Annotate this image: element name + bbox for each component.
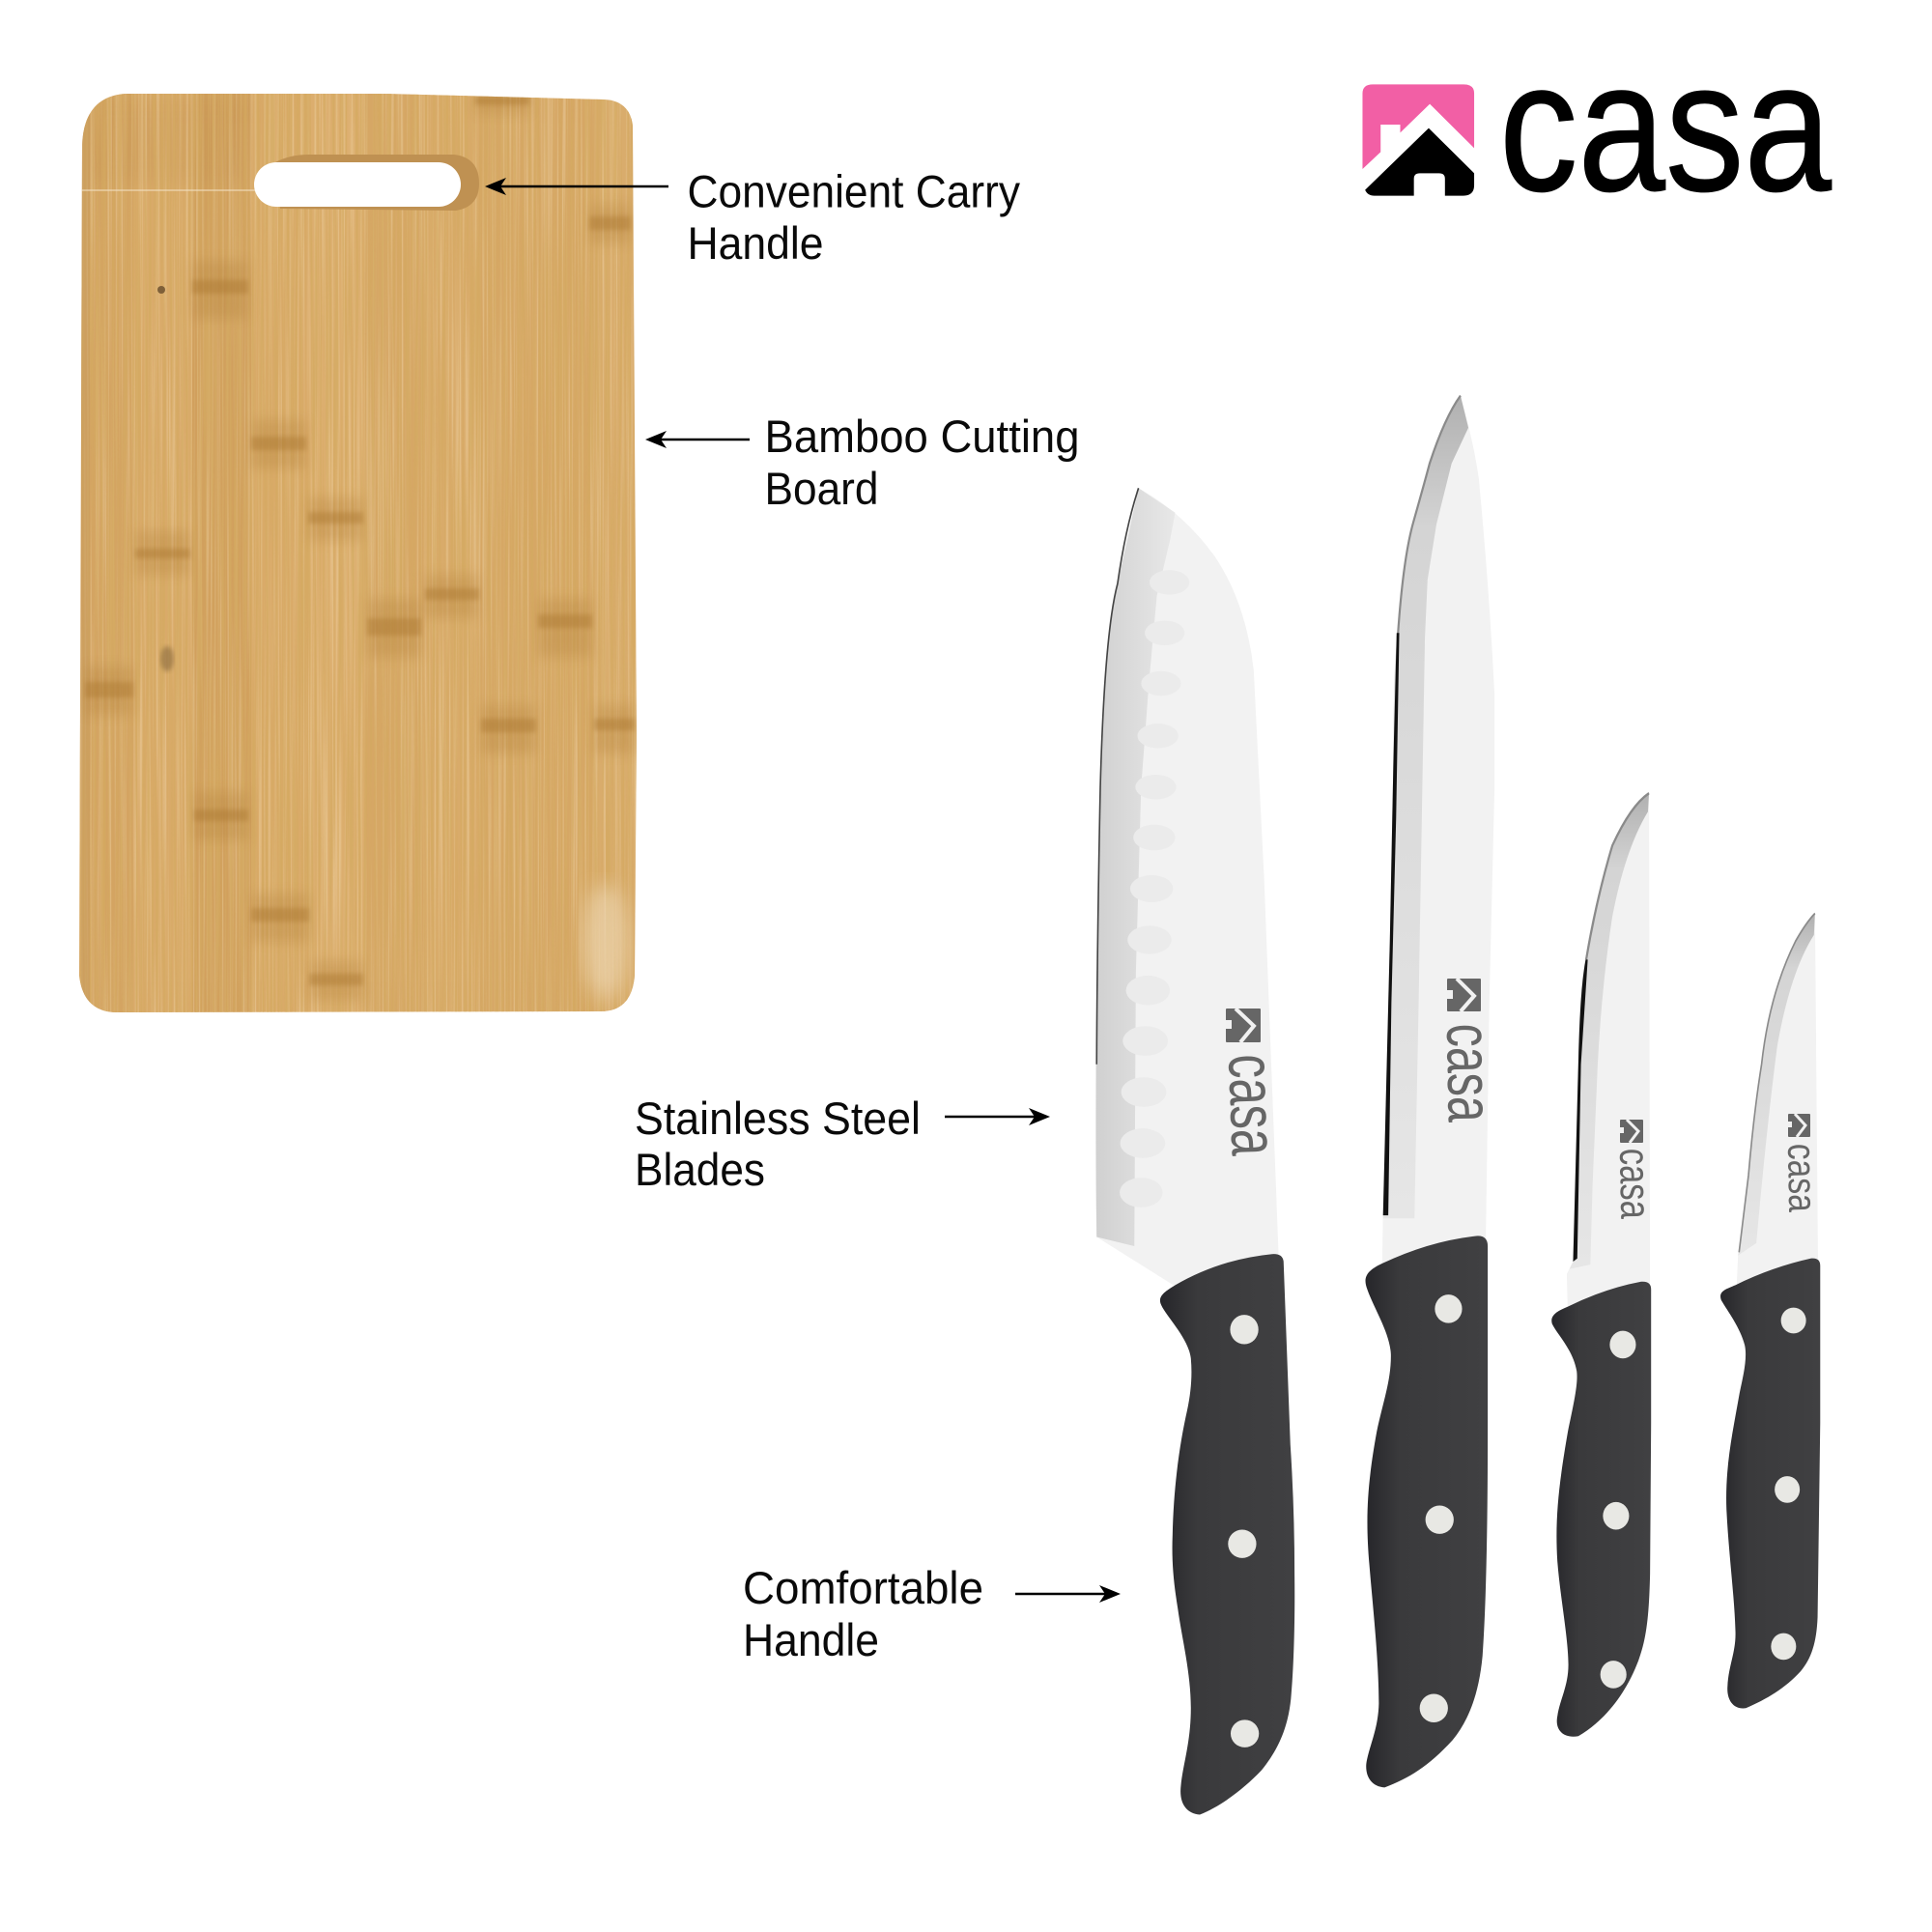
brand logo xyxy=(1362,22,1832,230)
callout: bamboo cutting board xyxy=(645,411,1080,514)
knife 4: paring knife xyxy=(1720,913,1825,1708)
carry handle cut-out xyxy=(254,155,479,211)
blade logo text: casa xyxy=(1214,1053,1292,1157)
utility handle xyxy=(1551,1282,1651,1737)
arrow: to board xyxy=(645,431,750,448)
chef blade xyxy=(1382,396,1494,1274)
arrow: to handle xyxy=(485,178,668,195)
logo wordmark: casa xyxy=(1499,22,1832,230)
label text: Stainless Steel xyxy=(635,1093,921,1144)
callout: stainless steel blades xyxy=(635,1093,1050,1195)
blade logo text: casa xyxy=(1610,1148,1659,1220)
blade logo mark xyxy=(1788,1114,1810,1137)
label text: Convenient Carry xyxy=(688,166,1020,216)
knife 3: utility knife xyxy=(1551,793,1659,1737)
blade logo mark xyxy=(1226,1009,1261,1042)
santoku handle xyxy=(1160,1254,1294,1815)
paring blade xyxy=(1737,913,1818,1293)
knife 2: chef knife xyxy=(1366,396,1507,1787)
label text: Handle xyxy=(688,217,823,269)
label text: Bamboo Cutting xyxy=(765,411,1080,462)
logo mark: house xyxy=(1362,84,1474,196)
arrow: to handle xyxy=(1015,1585,1121,1603)
knife 1: santoku xyxy=(1095,488,1294,1815)
paring handle xyxy=(1720,1259,1820,1708)
callout: comfortable handle xyxy=(743,1562,1121,1665)
utility blade xyxy=(1567,793,1650,1317)
label text: Handle xyxy=(743,1614,879,1665)
callout: convenient carry handle xyxy=(485,166,1020,269)
label text: Blades xyxy=(635,1144,765,1195)
chef handle xyxy=(1366,1236,1488,1787)
label text: Comfortable xyxy=(743,1562,983,1613)
label text: Board xyxy=(765,463,879,514)
arrow: to blade xyxy=(945,1108,1050,1125)
blade logo text: casa xyxy=(1779,1143,1825,1212)
blade logo mark xyxy=(1447,979,1481,1011)
blade logo text: casa xyxy=(1434,1023,1507,1122)
cutting board xyxy=(77,92,638,1014)
santoku blade xyxy=(1095,488,1279,1286)
blade logo mark xyxy=(1620,1120,1643,1143)
